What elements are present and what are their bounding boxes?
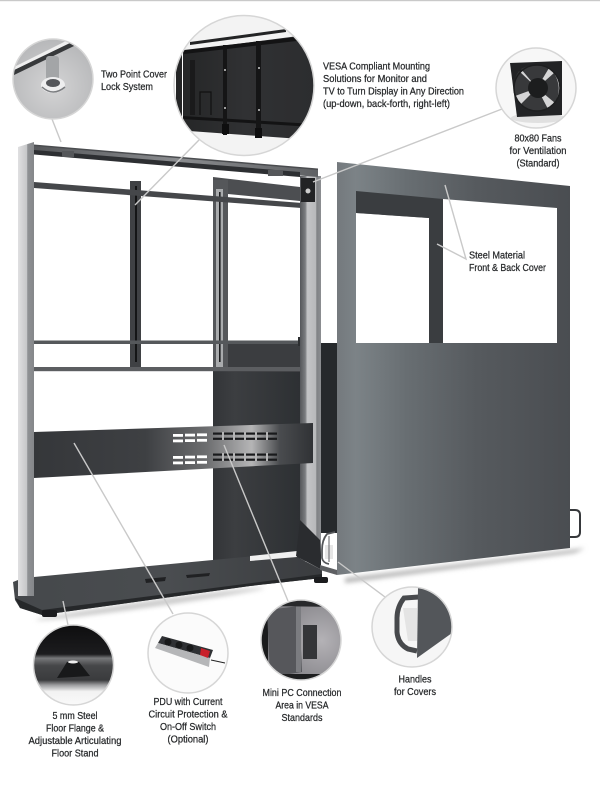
label: fans: (Standard) xyxy=(516,158,560,170)
callout: PDU xyxy=(148,613,228,746)
label: steel cover: Front & Back Cover xyxy=(469,262,546,274)
vertical mount rails xyxy=(130,180,228,370)
label: steel cover xyxy=(469,250,546,274)
label: fans xyxy=(510,132,567,170)
floor base plate xyxy=(13,520,328,623)
cover shadow xyxy=(345,548,585,583)
label: PDU xyxy=(148,696,228,746)
label: PDU: (Optional) xyxy=(168,734,208,746)
callout: VESA mounting xyxy=(174,15,464,157)
label: handles: for Covers xyxy=(394,686,436,698)
right post xyxy=(300,176,321,561)
small left handle xyxy=(320,532,337,575)
left post xyxy=(18,142,34,596)
label: fans: for Ventilation xyxy=(510,145,567,157)
label: fans: 80x80 Fans xyxy=(514,132,562,144)
icon: handle xyxy=(372,587,452,667)
icon: VESA panel xyxy=(174,15,314,157)
leader lines xyxy=(52,109,502,625)
label: PDU: PDU with Current xyxy=(154,696,223,708)
label: handles xyxy=(394,674,436,698)
icon: floor stand xyxy=(33,625,114,706)
label: lock xyxy=(101,68,167,93)
label: mini PC: Area in VESA xyxy=(276,700,328,712)
label: handles: Handles xyxy=(398,674,432,686)
callout: handles xyxy=(372,587,452,698)
label: VESA xyxy=(323,60,464,110)
label: VESA: TV to Turn Display in Any Direction xyxy=(323,86,464,98)
icon: lock xyxy=(10,37,93,119)
top bar xyxy=(34,144,318,202)
label: PDU: Circuit Protection & xyxy=(148,708,228,720)
icon: power strip xyxy=(155,636,226,667)
label: floor flange xyxy=(28,710,122,760)
callout: mini PC xyxy=(261,600,342,724)
icon: mini PC xyxy=(261,600,342,682)
label: PDU: On-Off Switch xyxy=(160,721,216,733)
upper inner panel xyxy=(213,177,300,201)
label: floor flange: Adjustable Articulating xyxy=(28,735,122,747)
label: floor flange: Floor Flange & xyxy=(46,722,104,734)
label: VESA: (up-down, back-forth, right-left) xyxy=(323,98,450,110)
label: lock: Lock System xyxy=(101,81,153,93)
label: steel cover: Steel Material xyxy=(469,250,525,262)
rear panel xyxy=(213,343,338,565)
cover panel xyxy=(337,162,570,575)
horizontal bars xyxy=(34,182,315,371)
label: lock: Two Point Cover xyxy=(101,68,167,80)
label: mini PC: Standards xyxy=(282,712,322,724)
label: floor flange: 5 mm Steel xyxy=(52,710,98,722)
label: VESA: Solutions for Monitor and xyxy=(323,73,427,85)
label: floor flange: Floor Stand xyxy=(52,748,99,760)
callout: floor flange xyxy=(28,625,122,760)
right handle xyxy=(570,510,580,537)
callout: fans xyxy=(496,48,577,170)
label: VESA: VESA Compliant Mounting xyxy=(323,60,430,72)
cross plate with vents xyxy=(34,423,313,478)
callout: lock system xyxy=(10,37,167,119)
label: mini PC xyxy=(262,687,342,724)
icon: fan xyxy=(510,61,563,123)
label: mini PC: Mini PC Connection xyxy=(262,687,342,699)
